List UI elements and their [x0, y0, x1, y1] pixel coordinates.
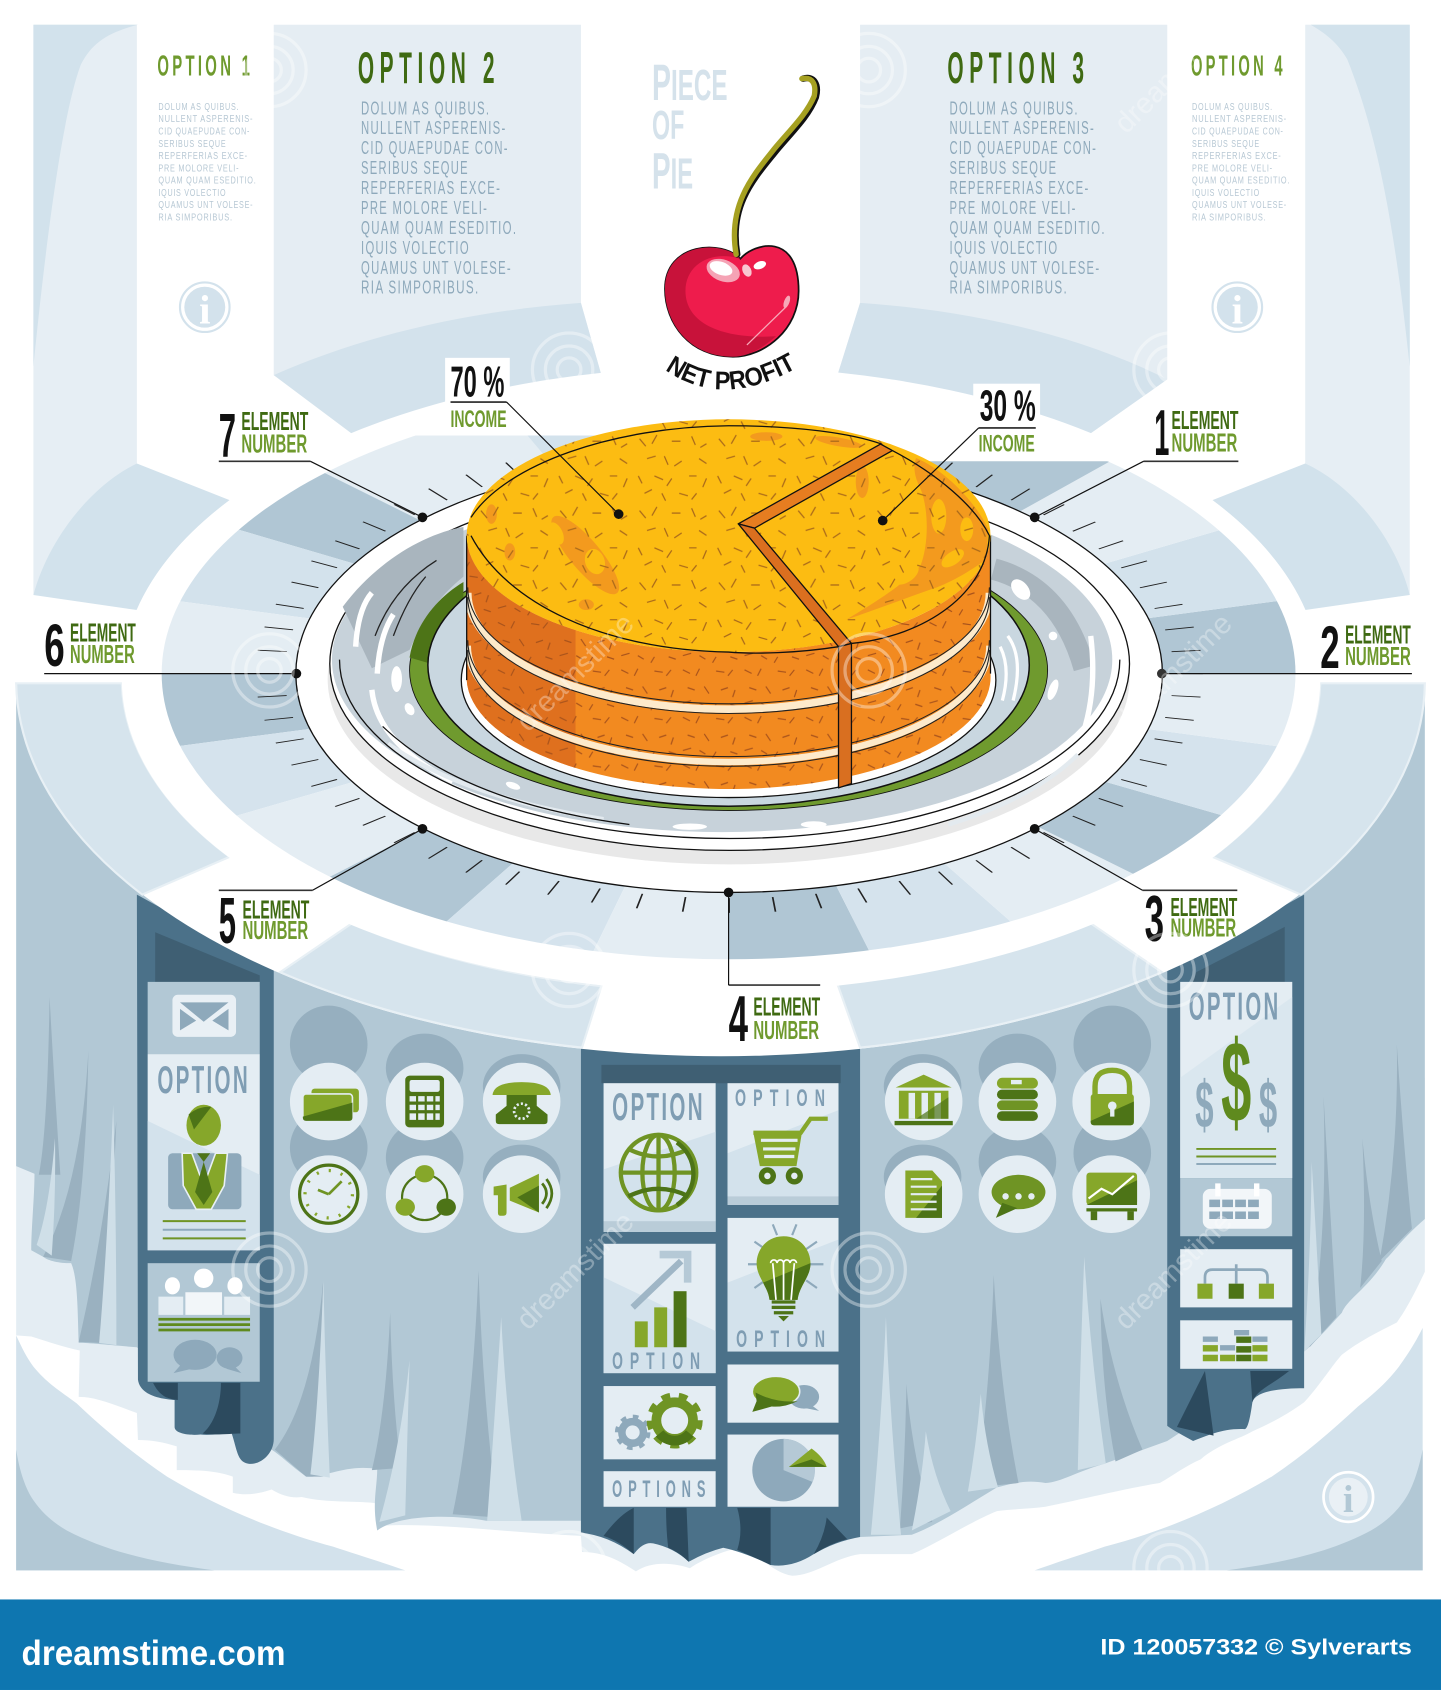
icon: info bottom right: i — [1343, 1478, 1354, 1521]
text block: option 3: OPTION 3 — [947, 44, 1090, 93]
text block: option 1: PRE MOLORE VELI- — [158, 162, 239, 174]
footer logo text: dreamstime.com — [22, 1633, 286, 1673]
card: centre gears — [604, 1386, 716, 1459]
watermark text: dreamstime — [510, 1206, 641, 1336]
callout: 30 percent income — [878, 382, 1040, 525]
footer bar — [0, 1599, 1441, 1690]
label: element 3: NUMBER — [1170, 915, 1236, 943]
text block: option 1: DOLUM AS QUIBUS. — [158, 101, 239, 113]
label: element 4 — [724, 888, 820, 1055]
title: piece of pie — [652, 54, 728, 200]
label: element 3: 3 — [1145, 882, 1164, 955]
label: element 5: 5 — [219, 884, 236, 957]
card: centre options label: OPTIONS — [612, 1477, 711, 1503]
watermark text — [510, 10, 1239, 1336]
text block: option 2: REPERFERIAS EXCE- — [361, 177, 501, 198]
floor: left corner — [16, 1335, 405, 1570]
callout: 70 percent income: 70 % — [451, 359, 504, 407]
label: element 4: NUMBER — [753, 1017, 819, 1045]
panel: left dark column — [137, 895, 274, 1464]
inner white ellipse with gauge line — [296, 455, 1162, 892]
cake top — [467, 419, 990, 653]
panel: centre dark column — [581, 1040, 860, 1566]
callout: 30 percent income: 30 % — [980, 382, 1036, 430]
text block: option 4: PRE MOLORE VELI- — [1192, 162, 1273, 174]
tablecloth — [16, 683, 1425, 1537]
label: element 1: 1 — [1154, 396, 1169, 469]
icon: chat bubble — [979, 1155, 1056, 1233]
card: left envelope — [148, 982, 260, 1054]
icon shadows on tablecloth — [290, 1006, 1151, 1209]
callout: 70 percent income: INCOME — [451, 407, 507, 433]
icon: coins — [979, 1063, 1056, 1140]
card: right equalizer — [1180, 1320, 1292, 1369]
card: centre pie chart — [728, 1435, 839, 1507]
text block: option 4: IQUIS VOLECTIO — [1192, 187, 1260, 199]
icon: info left — [180, 282, 230, 332]
floor: right corner — [1035, 1328, 1423, 1570]
text block: option 2: CID QUAEPUDAE CON- — [361, 137, 509, 158]
text block: option 4: OPTION 4 — [1191, 50, 1286, 82]
label: element 1 — [1030, 396, 1238, 522]
card: right dollars option: OPTION — [1189, 986, 1280, 1029]
text block: option 3: PRE MOLORE VELI- — [950, 197, 1077, 218]
icon: shopping cart — [753, 1119, 828, 1185]
cherry net profit icon — [664, 74, 820, 390]
card: centre bars option: OPTION — [612, 1349, 707, 1375]
text block: option 1: SERIBUS SEQUE — [158, 138, 226, 150]
text block: option 4: QUAM QUAM ESEDITIO. — [1192, 175, 1290, 187]
card: centre cart option — [728, 1083, 839, 1205]
label: element 3 — [1030, 824, 1237, 955]
text block: option 1: NULLENT ASPERENIS- — [158, 113, 253, 125]
label: element 4: 4 — [729, 982, 748, 1055]
label: element 5 — [219, 824, 427, 957]
panel: option 2 backdrop — [274, 25, 601, 433]
text block: option 3: CID QUAEPUDAE CON- — [950, 137, 1097, 158]
text block: option 4: QUAMUS UNT VOLESE- — [1192, 199, 1287, 211]
text block: option 1: QUAMUS UNT VOLESE- — [158, 199, 253, 211]
card: centre bulb option — [728, 1218, 839, 1353]
label: element 6: 6 — [44, 611, 65, 679]
text block: option 3 — [947, 44, 1106, 298]
title: piece of pie: OF — [652, 102, 684, 148]
text block: option 3: REPERFERIAS EXCE- — [950, 177, 1090, 198]
icon: network — [386, 1155, 463, 1233]
icon: light bulb — [748, 1224, 823, 1321]
icon: info right: i — [1232, 287, 1243, 332]
label: element 6 — [44, 611, 301, 679]
icon: presentation board — [1072, 1155, 1150, 1233]
tick band segments — [162, 436, 1296, 960]
text block: option 1 — [157, 50, 257, 224]
icon: padlock — [1072, 1063, 1150, 1140]
callout: 70 percent income — [445, 358, 623, 519]
text block: option 4: REPERFERIAS EXCE- — [1192, 150, 1281, 162]
cake — [463, 419, 997, 808]
card: centre globe option — [604, 1083, 716, 1232]
text block: option 2: NULLENT ASPERENIS- — [361, 117, 507, 138]
card: centre globe option: OPTION — [612, 1086, 705, 1129]
text block: option 2 — [358, 44, 517, 298]
watermark text: dreamstime — [1109, 1206, 1239, 1336]
icon: calculator — [386, 1063, 463, 1140]
gauge tick marks — [270, 442, 1188, 905]
watermark text: dreamstime — [1109, 608, 1239, 738]
card: centre options label — [604, 1471, 716, 1507]
icon: bank — [885, 1063, 962, 1140]
title: piece of pie: PIECE — [652, 54, 728, 111]
text block: option 3: IQUIS VOLECTIO — [950, 237, 1058, 258]
card: centre bars option — [604, 1244, 716, 1375]
icon: telephone — [483, 1063, 560, 1140]
text block: option 3: DOLUM AS QUIBUS. — [950, 97, 1079, 118]
text block: option 4: CID QUAEPUDAE CON- — [1192, 126, 1284, 138]
label: element 7 — [219, 401, 427, 522]
icon: globe — [621, 1135, 696, 1210]
text block: option 1: CID QUAEPUDAE CON- — [158, 126, 250, 138]
text block: option 2: OPTION 2 — [358, 44, 500, 93]
text block: option 4: NULLENT ASPERENIS- — [1192, 113, 1287, 125]
card: centre bulb option: OPTION — [736, 1327, 832, 1353]
white ring — [122, 366, 1320, 992]
text block: option 1: QUAM QUAM ESEDITIO. — [158, 175, 257, 187]
callout: 30 percent income: INCOME — [979, 432, 1035, 458]
label: element 4: ELEMENT — [753, 993, 820, 1021]
tablecloth hem — [16, 1078, 1425, 1576]
text block: option 1: IQUIS VOLECTIO — [158, 187, 226, 199]
icon: dollar signs — [1195, 1017, 1277, 1147]
cherry stem — [734, 78, 817, 254]
icon: info bottom right — [1324, 1472, 1373, 1522]
text block: option 4: DOLUM AS QUIBUS. — [1192, 101, 1273, 113]
text block: option 1: OPTION 1 — [157, 50, 253, 82]
label: element 1: NUMBER — [1172, 430, 1237, 458]
text block: option 2: IQUIS VOLECTIO — [361, 237, 470, 258]
label: element 7: ELEMENT — [241, 408, 308, 436]
icon: credit cards — [290, 1063, 368, 1140]
text block: option 1: REPERFERIAS EXCE- — [158, 150, 248, 162]
text block: option 3: QUAM QUAM ESEDITIO. — [950, 217, 1106, 238]
icon: info left: i — [199, 287, 210, 332]
card: left team — [148, 1263, 260, 1382]
label: element 1: ELEMENT — [1172, 407, 1238, 435]
text block: option 3: QUAMUS UNT VOLESE- — [950, 257, 1100, 278]
card: right dollars option: $ — [1259, 1068, 1277, 1142]
text block: option 2: RIA SIMPORIBUS. — [361, 277, 480, 298]
icon: gears — [618, 1396, 699, 1447]
label: element 7: 7 — [219, 401, 236, 471]
title: piece of pie: PIE — [652, 143, 693, 200]
label: element 5: ELEMENT — [243, 896, 309, 924]
icon: dollar signs: $ — [1221, 1017, 1251, 1147]
icon: megaphone — [483, 1155, 560, 1233]
net profit label: NET PROFIT — [666, 352, 792, 390]
cake side layers — [466, 536, 992, 789]
icon: document — [885, 1155, 962, 1233]
card: left person option: OPTION — [157, 1059, 250, 1102]
icon: dollar signs: $ — [1195, 1068, 1214, 1142]
icon: rising bars and arrow — [633, 1255, 688, 1347]
card: right calendar — [1180, 1178, 1292, 1236]
text block: option 4 — [1191, 50, 1290, 224]
card: right dollars option — [1180, 982, 1292, 1178]
text block: option 2: QUAM QUAM ESEDITIO. — [361, 217, 517, 238]
label: element 2: 2 — [1320, 613, 1340, 681]
card: right org chart — [1180, 1249, 1292, 1307]
text block: option 2: PRE MOLORE VELI- — [361, 197, 488, 218]
text block: option 2: DOLUM AS QUIBUS. — [361, 97, 490, 118]
cherry body — [665, 246, 799, 357]
text block: option 4: SERIBUS SEQUE — [1192, 138, 1260, 150]
text block: option 3: RIA SIMPORIBUS. — [950, 277, 1068, 298]
label: element 3: ELEMENT — [1170, 894, 1237, 922]
text block: option 2: SERIBUS SEQUE — [361, 157, 469, 178]
watermark text: dreamstime — [510, 608, 641, 738]
plate green ring — [410, 524, 1048, 811]
label: element 5: NUMBER — [243, 917, 308, 945]
icon: info right — [1213, 282, 1262, 332]
icon: clock — [290, 1155, 368, 1233]
card: centre chat — [728, 1364, 839, 1423]
card: centre cart option: OPTION — [735, 1086, 832, 1112]
text block: option 1: RIA SIMPORIBUS. — [158, 212, 233, 224]
label: element 7: NUMBER — [241, 431, 307, 459]
panel: far right column — [1213, 25, 1410, 610]
watermark spirals — [233, 33, 1207, 1605]
text block: option 4: RIA SIMPORIBUS. — [1192, 212, 1266, 224]
watermark text: dreamstime — [1109, 10, 1239, 140]
label: element 6: ELEMENT — [70, 619, 136, 647]
label: element 6: NUMBER — [70, 641, 135, 669]
panel: right dark column — [1167, 895, 1304, 1441]
table top white base — [16, 679, 1426, 1056]
text block: option 3: NULLENT ASPERENIS- — [950, 117, 1095, 138]
plate — [328, 477, 1130, 864]
panel: far left column — [33, 25, 230, 610]
footer credit: ID 120057332 © Sylverarts — [1100, 1634, 1412, 1659]
panel: option 3 backdrop — [837, 25, 1167, 433]
text block: option 2: QUAMUS UNT VOLESE- — [361, 257, 512, 278]
outer table band: segments — [16, 683, 1425, 1048]
label: element 2 — [1157, 613, 1412, 681]
card: left person option — [148, 1054, 260, 1250]
cake slice cut — [738, 444, 892, 788]
text block: option 3: SERIBUS SEQUE — [950, 157, 1057, 178]
